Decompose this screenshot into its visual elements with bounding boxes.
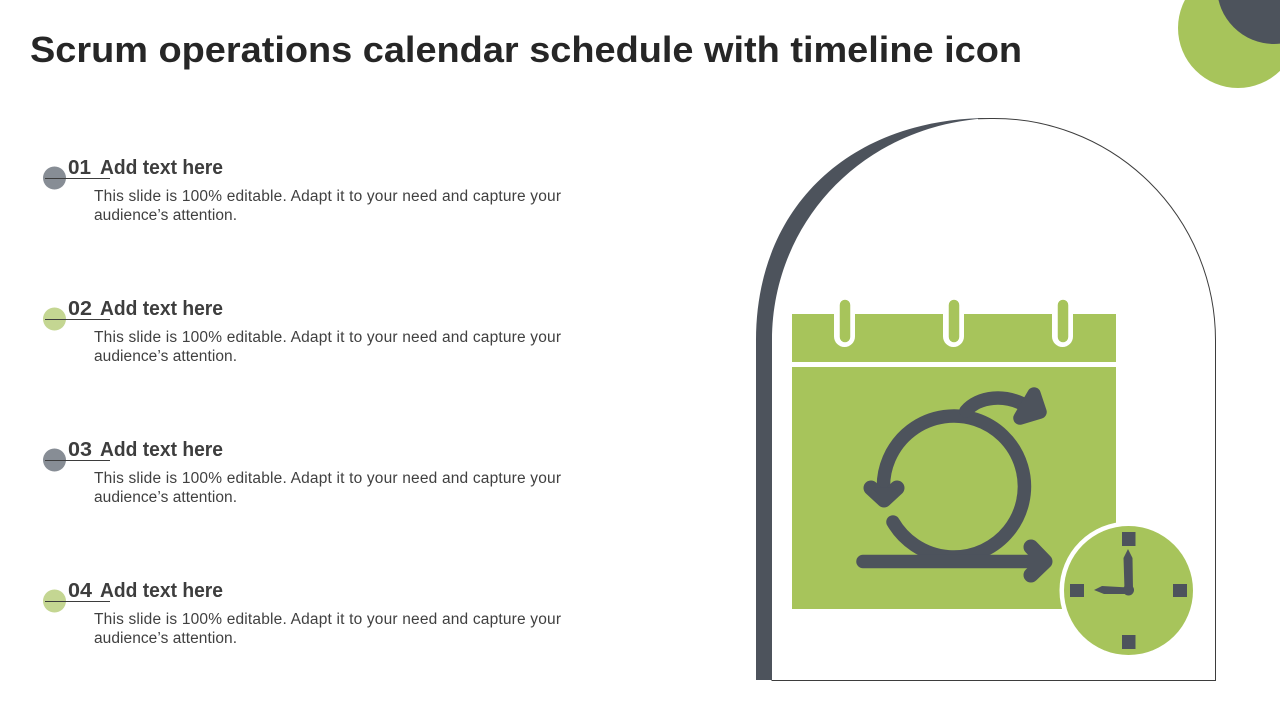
list item 04: Add text here	[100, 580, 223, 602]
list item 01: audience’s attention.	[94, 207, 237, 224]
icon: calendar	[792, 305, 1116, 609]
icon: scrum cycle arrows	[863, 394, 1045, 575]
list item 02	[43, 298, 561, 365]
icon: calendar rings	[834, 305, 1073, 347]
list item 03: 03	[68, 439, 92, 461]
list item 03	[43, 439, 561, 506]
list item 02: audience’s attention.	[94, 348, 237, 365]
icon: clock	[1060, 522, 1198, 660]
list item 02: Add text here	[100, 298, 223, 320]
list item 03: Add text here	[100, 439, 223, 461]
list item 04: This slide is 100% editable. Adapt it to your need and capture your	[94, 611, 561, 628]
list item 01: This slide is 100% editable. Adapt it to your need and capture your	[94, 188, 561, 205]
decorative corner circles	[1178, 0, 1280, 88]
list item 03: This slide is 100% editable. Adapt it to your need and capture your	[94, 470, 561, 487]
list item 01: 01	[68, 157, 91, 179]
list item 01: Add text here	[100, 157, 223, 179]
list item 04	[43, 580, 561, 647]
list item 03: audience’s attention.	[94, 489, 237, 506]
arch frame	[756, 118, 1216, 680]
list item 04: 04	[68, 580, 93, 602]
list item 02: 02	[68, 298, 92, 320]
list item 01	[43, 157, 561, 224]
title: Scrum operations calendar schedule with timeline icon	[30, 29, 1022, 70]
list item 02: This slide is 100% editable. Adapt it to your need and capture your	[94, 329, 561, 346]
list item 04: audience’s attention.	[94, 630, 237, 647]
clock hands	[1094, 549, 1134, 596]
